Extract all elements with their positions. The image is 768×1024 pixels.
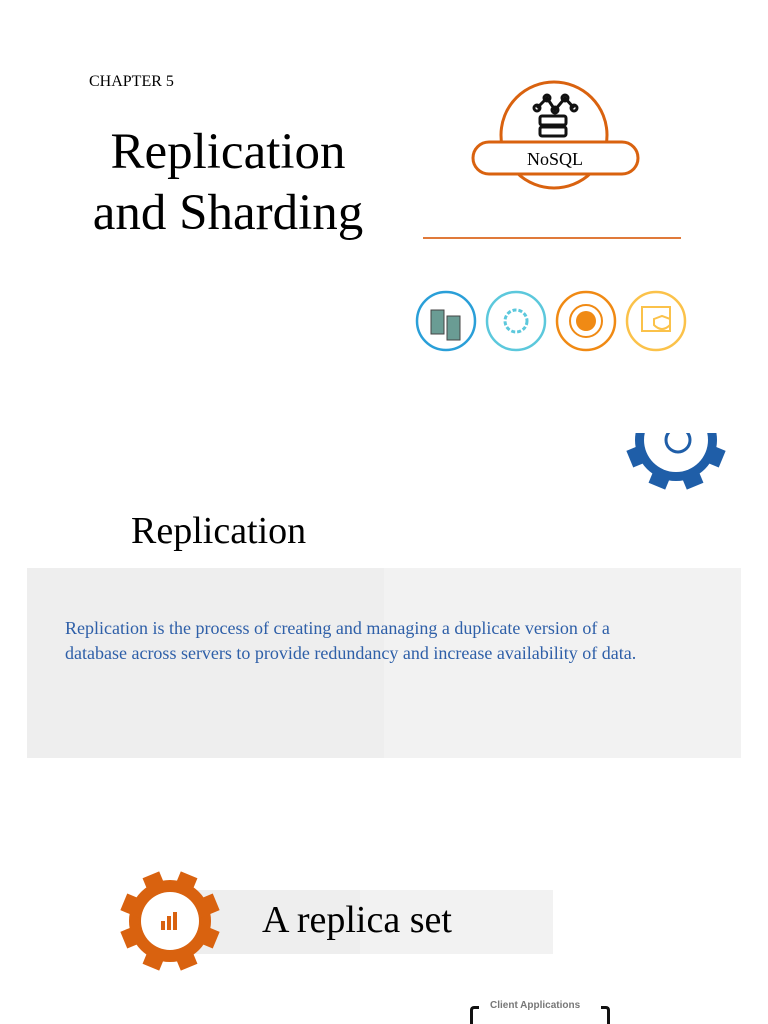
chapter label: CHAPTER 5 (89, 73, 174, 90)
logo: NoSQL (472, 80, 640, 190)
logo: NoSQL: NoSQL (527, 149, 583, 169)
icon: blue gear (626, 433, 726, 490)
definition text (65, 618, 636, 663)
definition text: database across servers to provide redundancy and increase availability of data. (65, 643, 636, 663)
heading bar: A replica set: A replica set (262, 899, 452, 941)
divider line (423, 237, 681, 239)
diagram: client applications (470, 1000, 610, 1024)
diagram: client applications: Client Applications (490, 1000, 580, 1011)
definition text: Replication is the process of creating and managing a duplicate version of a (65, 618, 610, 638)
panel: definition (27, 568, 741, 758)
heading bar: A replica set (170, 890, 553, 954)
icon: orange gear (120, 871, 220, 971)
title: Replication and Sharding (93, 124, 363, 241)
icon row (416, 290, 686, 352)
heading: Replication: Replication (131, 510, 306, 552)
